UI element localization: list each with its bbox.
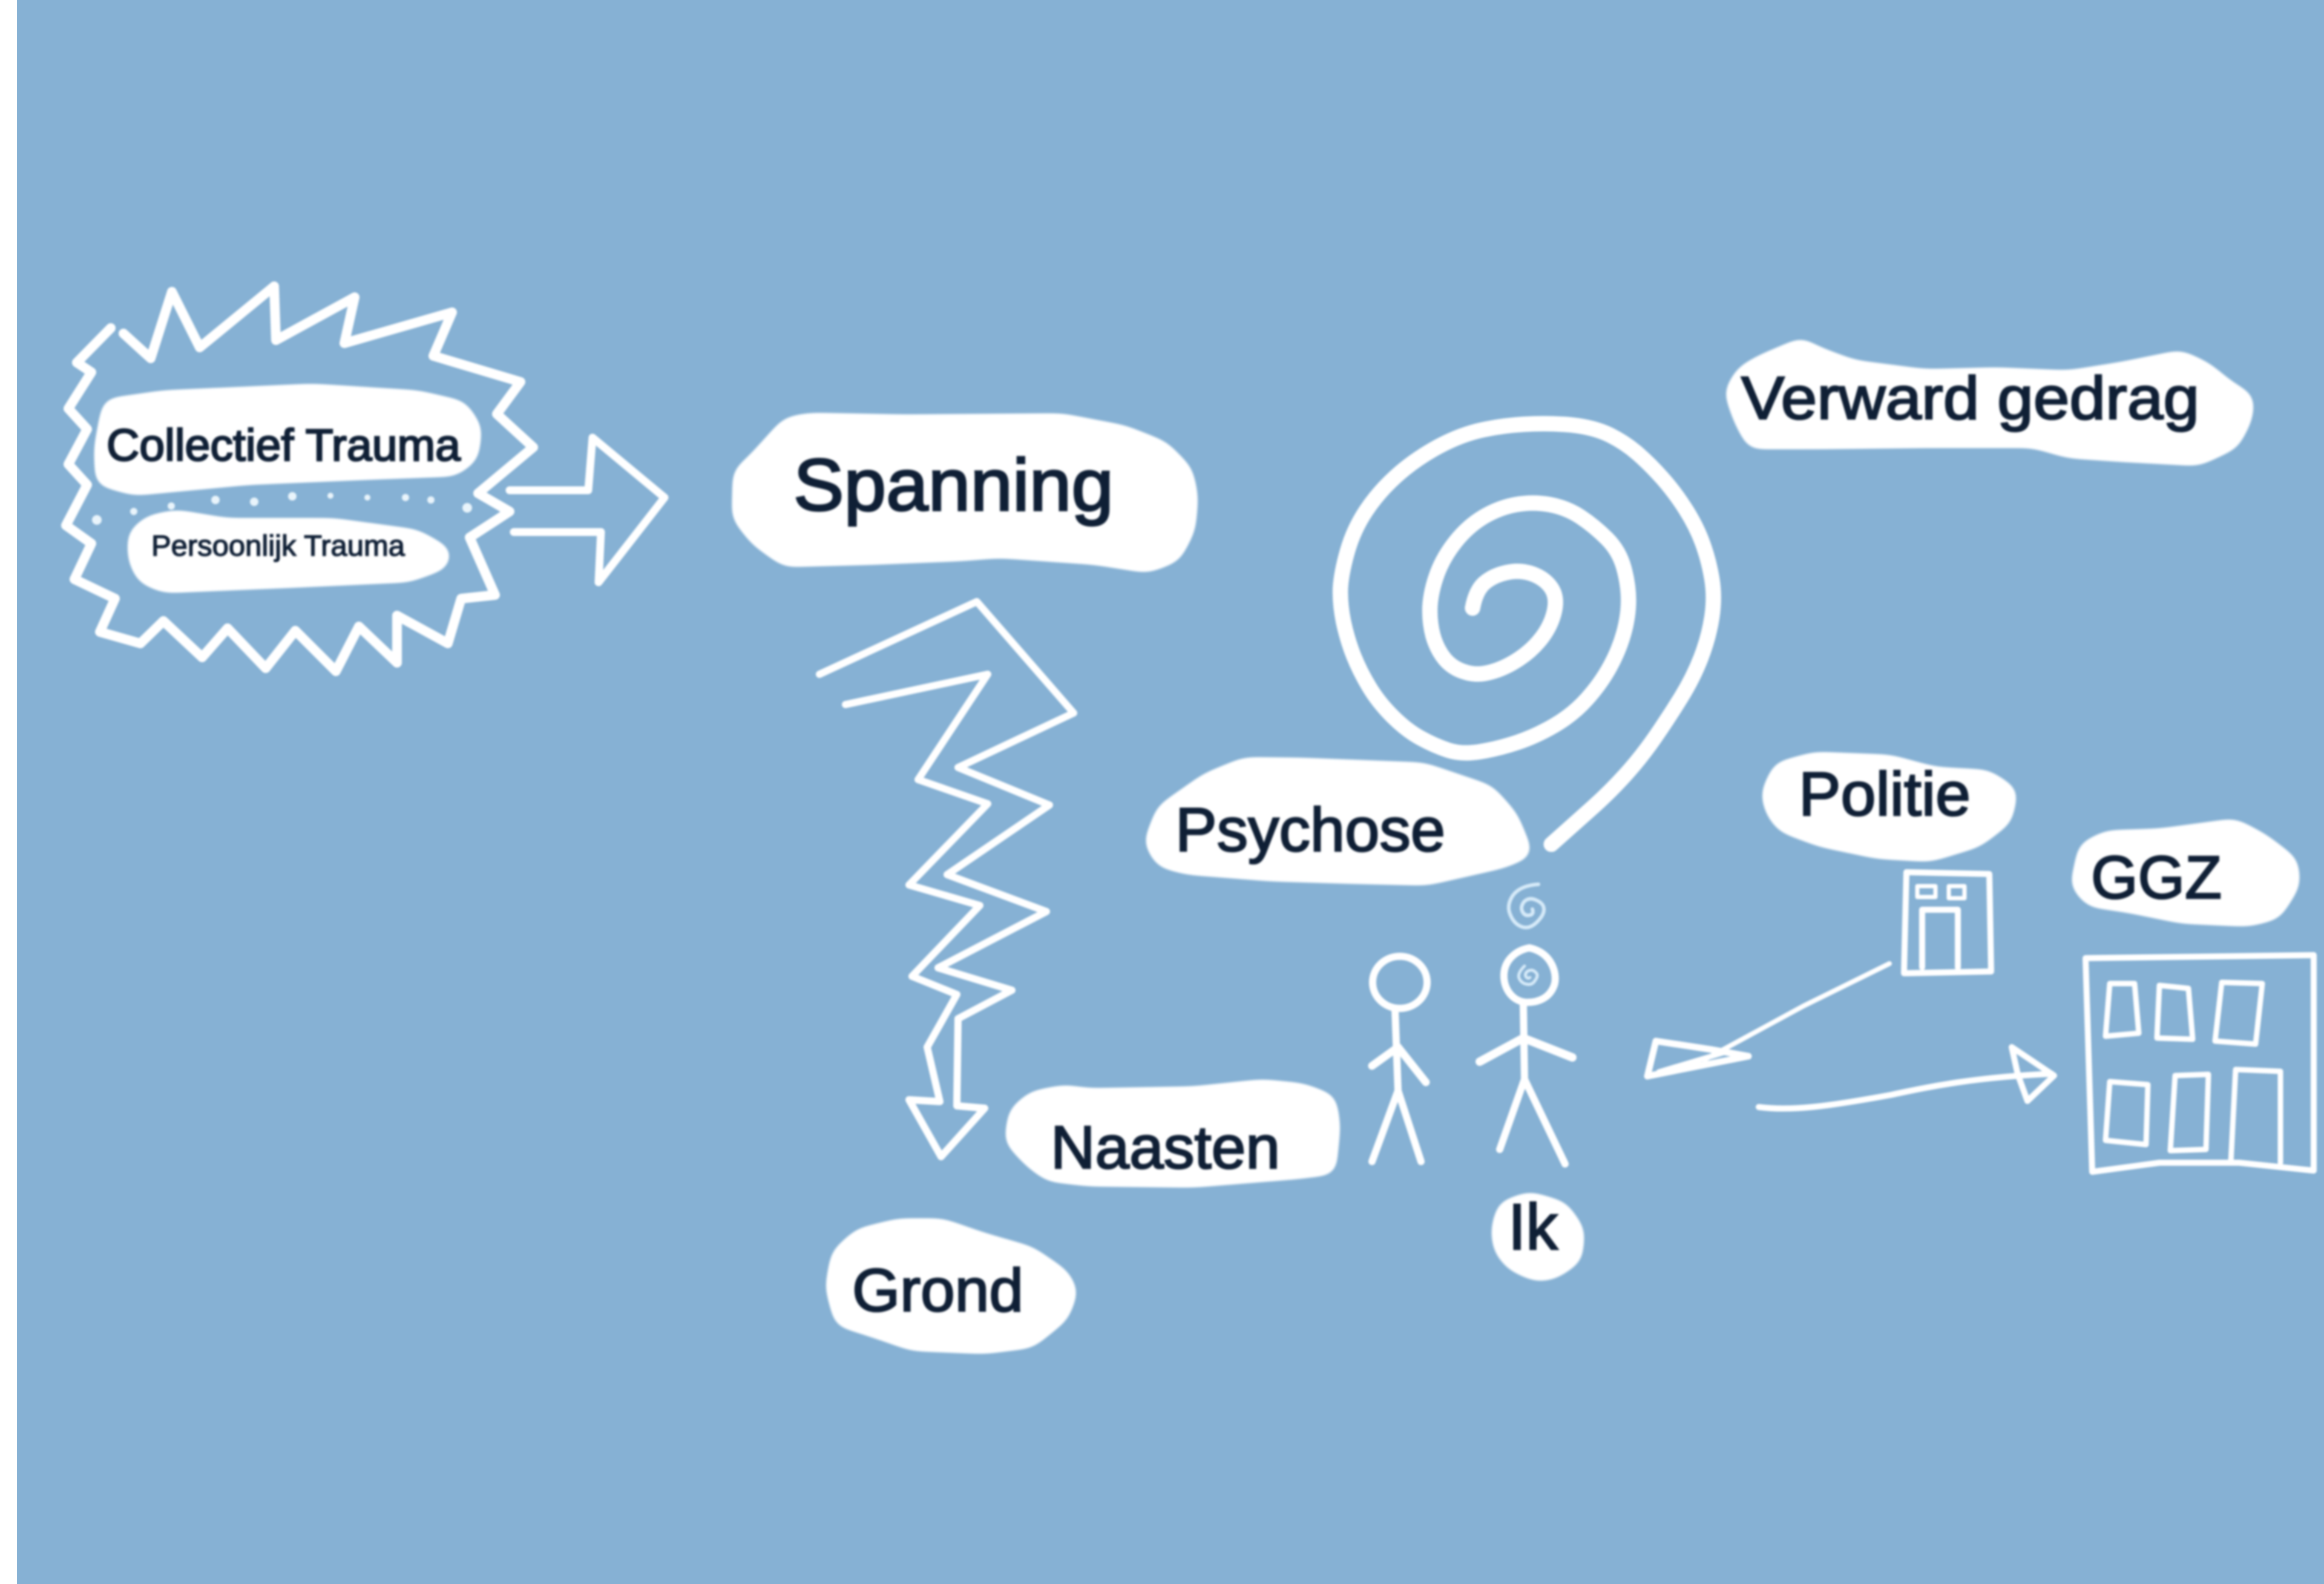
label: Politie: Politie	[1799, 760, 1971, 829]
icon: stick figure naaste	[1372, 956, 1427, 1162]
label: Spanning	[732, 413, 1198, 573]
arrow: trauma to spanning	[510, 438, 665, 582]
label: Grond: Grond	[852, 1257, 1023, 1324]
label: Psychose	[1143, 757, 1532, 886]
arrow: ik to GGZ	[1759, 1047, 2054, 1109]
left white margin strip	[0, 0, 17, 1584]
icon: police building	[1904, 872, 1991, 973]
label: Persoonlijk Trauma: Persoonlijk Trauma	[151, 530, 405, 562]
label: Ik: Ik	[1508, 1190, 1558, 1263]
label: Naasten	[1004, 1079, 1341, 1188]
label: Collectief Trauma: Collectief Trauma	[107, 420, 461, 470]
label: Grond	[825, 1218, 1078, 1354]
jagged burst outline	[66, 286, 533, 671]
full scene	[66, 286, 2314, 1354]
icon: GGZ building	[2086, 955, 2314, 1172]
label: Psychose: Psychose	[1175, 795, 1445, 864]
label: Verward gedrag: Verward gedrag	[1741, 364, 2199, 432]
trauma burst panel	[66, 286, 533, 671]
arrow: police to ik	[1647, 964, 1889, 1076]
label: Naasten: Naasten	[1051, 1114, 1280, 1181]
label: Spanning: Spanning	[793, 444, 1114, 526]
label: Politie	[1761, 752, 2018, 862]
label: GGZ	[2070, 818, 2300, 927]
label: Verward gedrag	[1724, 337, 2254, 466]
label: Collectief Trauma	[94, 384, 482, 496]
dotted divider between traumas	[92, 492, 472, 525]
icon: stick figure ik	[1480, 948, 1572, 1164]
large spiral	[1341, 424, 1713, 844]
icon: small spiral above head	[1509, 884, 1544, 927]
label: Ik	[1491, 1190, 1585, 1282]
label: Persoonlijk Trauma	[128, 510, 452, 593]
label: GGZ: GGZ	[2091, 844, 2222, 912]
arrow: lightning bolt down to ground	[819, 602, 1074, 1157]
